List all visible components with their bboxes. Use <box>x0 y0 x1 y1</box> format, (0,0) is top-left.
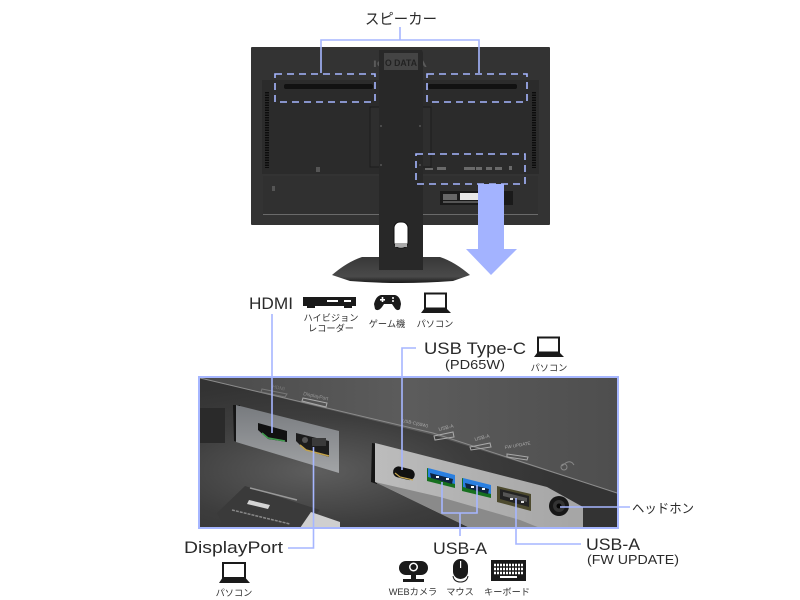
panel edge line <box>200 378 617 493</box>
speaker heading: スピーカー <box>365 11 437 28</box>
USB-A FW heading: USB-A <box>586 535 641 554</box>
lower housing <box>199 378 617 528</box>
left speaker slot <box>284 84 373 89</box>
cap logo: O DATA <box>385 58 417 69</box>
usb-a port black <box>497 486 531 511</box>
stand base <box>332 257 470 283</box>
usb-c port <box>393 466 415 481</box>
USB-A heading: USB-A <box>433 539 488 558</box>
right port plate <box>375 443 583 528</box>
hdmi dp recess <box>233 405 240 443</box>
usb-a port blue 1 <box>427 468 455 488</box>
printed port marks: USB-A <box>438 423 455 433</box>
recorder label: レコーダー <box>308 322 354 334</box>
icon: webcam <box>399 561 428 582</box>
icon: laptop usb-c <box>534 338 564 357</box>
FW update note: (FW UPDATE) <box>587 553 679 567</box>
printed port marks: FW UPDATE <box>504 441 531 450</box>
stand screws <box>380 125 421 166</box>
printed port marks: HDMI <box>272 384 285 393</box>
lower panel edge <box>263 214 538 216</box>
icon: laptop hdmi <box>421 294 451 313</box>
usb-a port blue 2 <box>462 478 491 498</box>
upper rear panel <box>262 80 539 174</box>
PD65W note: (PD65W) <box>445 358 505 372</box>
PC label usb-c: パソコン <box>531 363 567 373</box>
rating label <box>440 191 513 205</box>
printed port marks: DisplayPort <box>303 391 329 402</box>
HDMI callout line <box>271 314 273 433</box>
displayport port <box>296 433 329 457</box>
icon: game controller <box>374 295 401 310</box>
speaker callout lines <box>321 27 479 73</box>
mouse label: マウス <box>446 587 474 597</box>
brand logo: IO DATA <box>373 59 427 70</box>
USB Type-C heading: USB Type-C <box>424 339 526 358</box>
headphone jack <box>549 496 569 516</box>
PC label displayport: パソコン <box>216 588 252 598</box>
webcam label: WEBカメラ <box>389 587 437 597</box>
recorder label: ハイビジョン <box>304 313 358 323</box>
down arrow <box>466 184 517 275</box>
headphone label: ヘッドホン <box>632 501 694 516</box>
icon: mouse <box>453 559 468 582</box>
game console label: ゲーム機 <box>369 318 405 329</box>
left speaker highlight <box>275 74 375 102</box>
icon: recorder <box>303 297 356 308</box>
right speaker slot <box>428 84 517 89</box>
keyboard label: キーボード <box>484 587 530 597</box>
port close-up photo <box>199 377 618 528</box>
cable hole <box>394 222 408 248</box>
port labels strip <box>425 166 512 170</box>
USB-A callout line <box>442 482 477 536</box>
monitor rear view <box>251 47 550 283</box>
left block <box>199 408 225 443</box>
printed port marks <box>261 384 574 470</box>
textured lower plate <box>375 482 540 528</box>
left port plate <box>236 405 339 473</box>
right port recess <box>371 443 377 484</box>
product sticker <box>228 486 340 527</box>
icon: laptop displayport <box>219 563 250 583</box>
PC label hdmi: パソコン <box>417 319 453 329</box>
stand neck <box>379 50 423 270</box>
cable hole shadow <box>395 243 407 247</box>
HDMI heading: HDMI <box>249 294 293 313</box>
right vent <box>532 92 536 168</box>
right speaker highlight <box>427 74 527 102</box>
printed port marks: USB-C(65W) <box>402 418 429 429</box>
monitor body <box>251 47 550 225</box>
icon: keyboard <box>491 560 526 581</box>
stand top cap <box>384 53 418 70</box>
ports highlight <box>416 154 525 184</box>
printed port marks: USB-A <box>474 433 491 443</box>
lock slot <box>272 186 275 191</box>
photo border <box>199 377 618 528</box>
hdmi port <box>258 423 287 442</box>
headphone callout line <box>560 506 630 508</box>
USB-C callout line <box>402 348 416 470</box>
upper rear surface <box>202 378 617 492</box>
DisplayPort heading: DisplayPort <box>184 538 283 557</box>
USB-A FW callout line <box>516 498 581 544</box>
left vent <box>265 92 269 168</box>
small icons <box>316 167 320 172</box>
lower rear panel <box>263 176 538 215</box>
vesa door <box>370 107 431 167</box>
DisplayPort callout line <box>288 447 314 548</box>
